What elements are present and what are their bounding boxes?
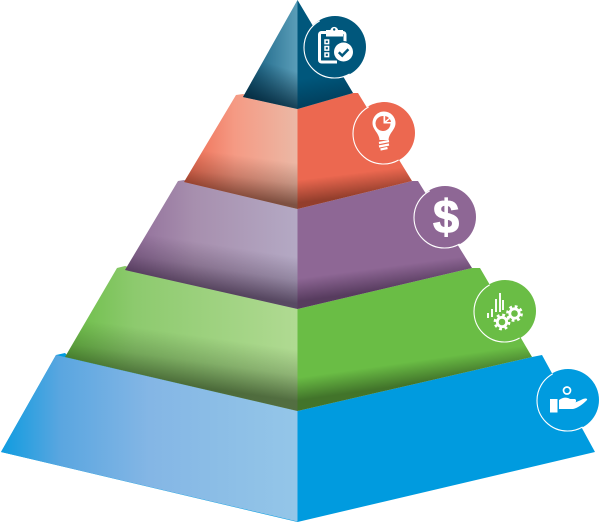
icon: open hand badge	[537, 369, 599, 431]
icon: dollar sign badge: $	[433, 190, 459, 243]
tier 1: apex	[243, 0, 353, 109]
tier 4: green	[65, 266, 532, 411]
icon: clipboard checklist badge	[304, 16, 366, 78]
icon: chart and gears badge	[474, 280, 536, 342]
tier 3: purple	[125, 180, 472, 309]
icon: dollar sign badge	[414, 186, 476, 248]
icon: light bulb badge	[353, 102, 415, 164]
tier 5: blue base	[1, 353, 595, 522]
tier 2: coral	[184, 93, 412, 209]
